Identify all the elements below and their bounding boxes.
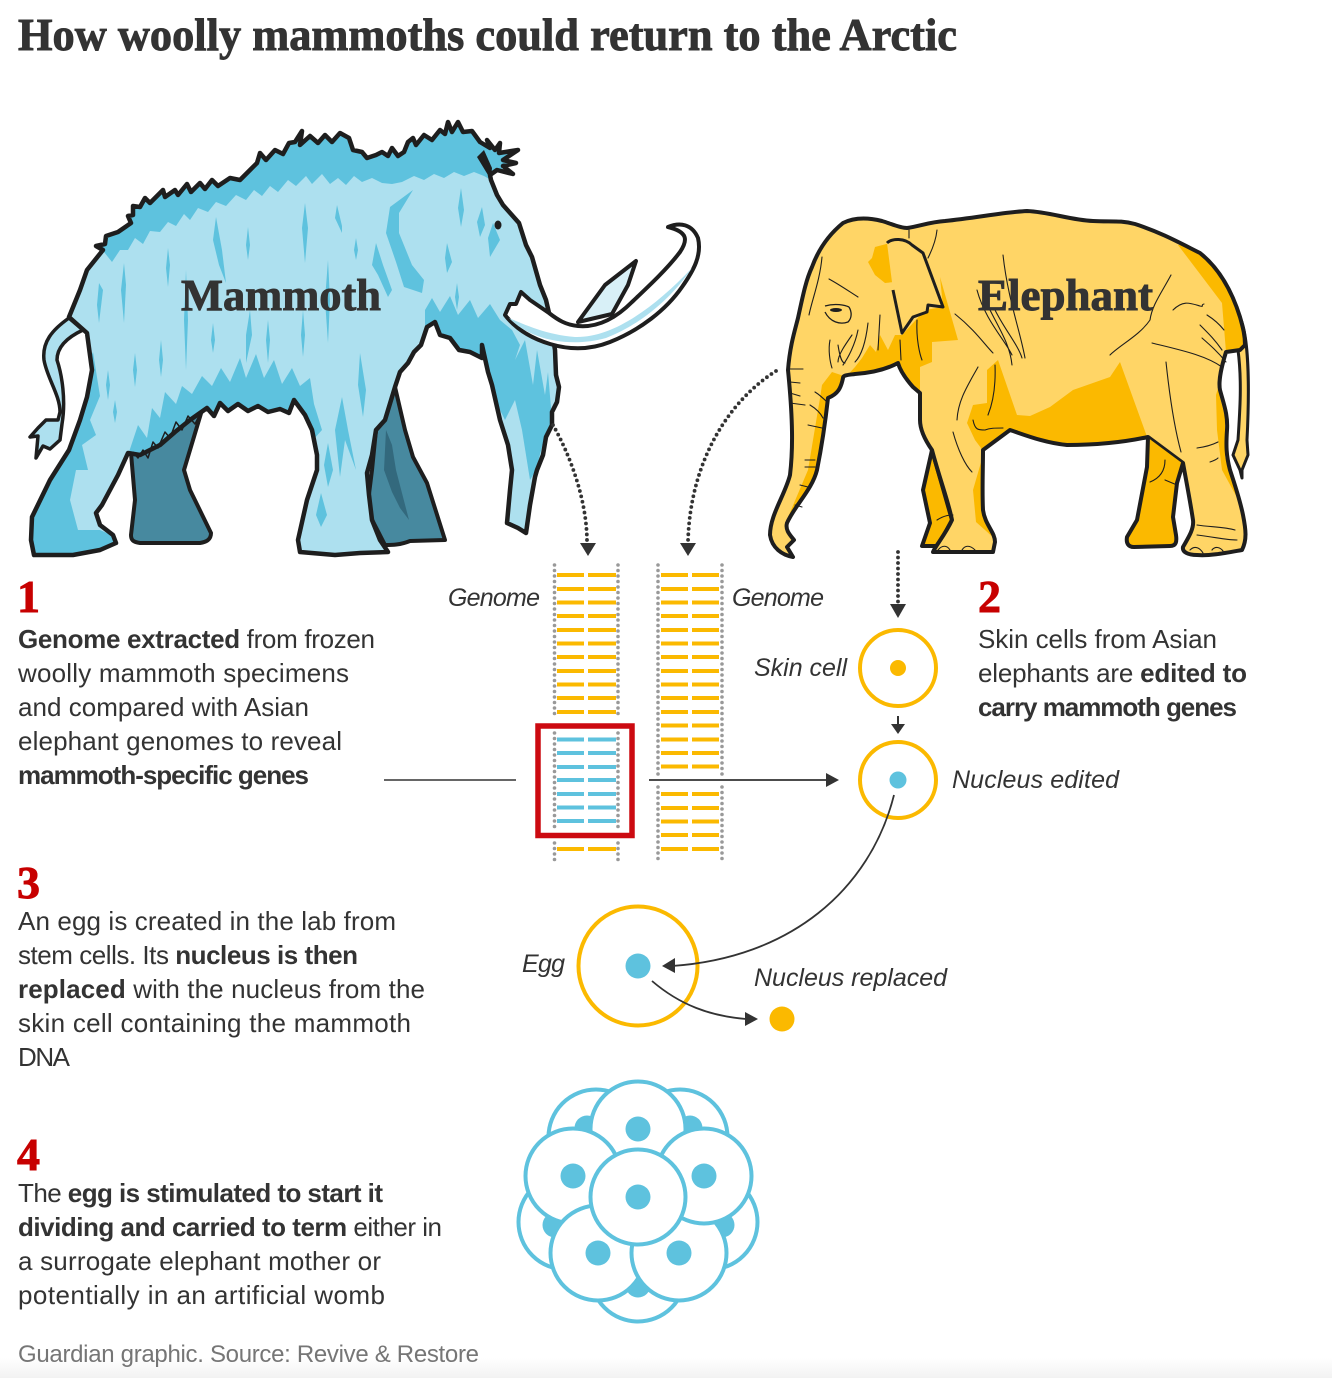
- step 2 text: Skin cells from Asian: [978, 624, 1217, 654]
- step 4 text: [18, 1178, 442, 1310]
- egg cell: [578, 906, 698, 1026]
- edited cell: [860, 742, 936, 818]
- illustration: elephant: [770, 211, 1250, 557]
- shading: trunk edge: [788, 372, 842, 516]
- elephant far hind leg: [1127, 437, 1183, 547]
- label: Elephant: Elephant: [978, 271, 1153, 320]
- step 2 text: carry mammoth genes: [978, 692, 1237, 722]
- label: skin cell: Skin cell: [754, 654, 848, 682]
- arrow: mammoth to genome: [553, 425, 596, 556]
- arrow: old nucleus removed: [652, 981, 758, 1026]
- connector line: text to red box: [384, 779, 516, 781]
- shading: rump: [1178, 245, 1243, 350]
- step 1 text: woolly mammoth specimens: [17, 658, 349, 688]
- mammoth body fill: [31, 122, 559, 555]
- shading: chest and trunk: [425, 296, 552, 480]
- step 4 text: a surrogate elephant mother or: [18, 1246, 381, 1276]
- step 3 text: An egg is created in the lab from: [18, 906, 396, 936]
- title: How woolly mammoths could return to the Arctic: [18, 9, 957, 60]
- label: genome left: Genome: [448, 584, 540, 612]
- step 4 number: 4: [17, 1129, 40, 1180]
- step 3 text: [18, 906, 425, 1072]
- step 1 number: 1: [17, 571, 40, 622]
- dividing embryo cluster: [518, 1082, 758, 1322]
- label: nucleus edited: Nucleus edited: [952, 766, 1120, 794]
- label: egg: Egg: [522, 950, 565, 978]
- mammoth body outline: [31, 122, 559, 555]
- strand backbones: [658, 565, 722, 860]
- step 1 text: and compared with Asian: [18, 692, 309, 722]
- arrow: skin cell to edited nucleus: [891, 716, 905, 734]
- elephant wrinkles: [790, 230, 1237, 553]
- yellow rungs: [661, 575, 719, 849]
- step 2 text: elephants are edited to: [978, 658, 1247, 688]
- arrow: elephant to genome: [680, 371, 776, 556]
- mammoth fur streaks: [97, 188, 529, 527]
- mammoth eye: [494, 220, 502, 230]
- mammoth fringe line: [133, 410, 202, 458]
- genome strand: elephant: [658, 565, 722, 860]
- elephant far front leg: [922, 450, 952, 546]
- shading: hind leg and foot: [33, 352, 114, 553]
- yellow rungs: [557, 575, 616, 849]
- step 3 text: DNA: [18, 1042, 71, 1072]
- step 1 text: mammoth-specific genes: [18, 760, 309, 790]
- arrow: genes to nucleus: [649, 773, 839, 787]
- step 3 text: replaced with the nucleus from the: [18, 974, 425, 1004]
- mammoth head tuft: [477, 150, 492, 180]
- step 3 number: 3: [17, 857, 40, 908]
- elephant tail: [1233, 317, 1248, 478]
- back cells: [518, 1090, 758, 1322]
- elephant body fill: [770, 211, 1246, 557]
- red highlight box: [538, 726, 632, 836]
- step 1 text: [17, 624, 375, 790]
- shading: neck and jaw: [843, 277, 958, 395]
- step 1 text: elephant genomes to reveal: [18, 726, 342, 756]
- shading: ear patch: [868, 244, 892, 283]
- label: genome right: Genome: [732, 584, 824, 612]
- label: Mammoth: Mammoth: [181, 271, 381, 320]
- mammoth far front leg: [367, 387, 445, 545]
- elephant shading: [786, 243, 1250, 540]
- label: nucleus replaced: Nucleus replaced: [754, 964, 948, 992]
- elephant ear: [887, 239, 943, 333]
- step 3 text: stem cells. Its nucleus is then: [18, 940, 358, 970]
- mammoth far hind leg: [131, 410, 211, 543]
- removed nucleus: [770, 1006, 794, 1032]
- shading: back: [102, 127, 508, 262]
- source line: Guardian graphic. Source: Revive & Restore: [18, 1341, 479, 1368]
- elephant body outline: [770, 211, 1246, 557]
- arrow: edited nucleus to egg: [662, 795, 894, 973]
- step 4 text: dividing and carried to term either in: [18, 1212, 442, 1242]
- front cells: [526, 1082, 752, 1300]
- tusk shading: [509, 268, 692, 342]
- step 2 number: 2: [978, 571, 1001, 622]
- step 2 text: [978, 624, 1247, 722]
- mammoth tail: [30, 318, 83, 458]
- skin cell: [860, 630, 936, 706]
- genome strand: mammoth: [538, 565, 632, 860]
- step 3 text: skin cell containing the mammoth: [18, 1008, 411, 1038]
- shading: belly: [129, 354, 322, 453]
- mammoth shading: [20, 100, 552, 560]
- arrow: elephant to skin cell: [890, 552, 906, 618]
- step 4 text: potentially in an artificial womb: [18, 1280, 385, 1310]
- mammoth rear tusk: [578, 261, 636, 322]
- illustration: mammoth: [20, 100, 699, 560]
- step 1 text: Genome extracted from frozen: [18, 624, 375, 654]
- shading: rear leg edge: [1216, 388, 1236, 496]
- shading: belly: [967, 360, 1150, 540]
- strand backbones: [554, 565, 618, 860]
- step 4 text: The egg is stimulated to start it: [18, 1178, 383, 1208]
- elephant eye: [825, 304, 851, 323]
- mammoth front tusk: [505, 225, 699, 348]
- blue rungs: [557, 740, 616, 821]
